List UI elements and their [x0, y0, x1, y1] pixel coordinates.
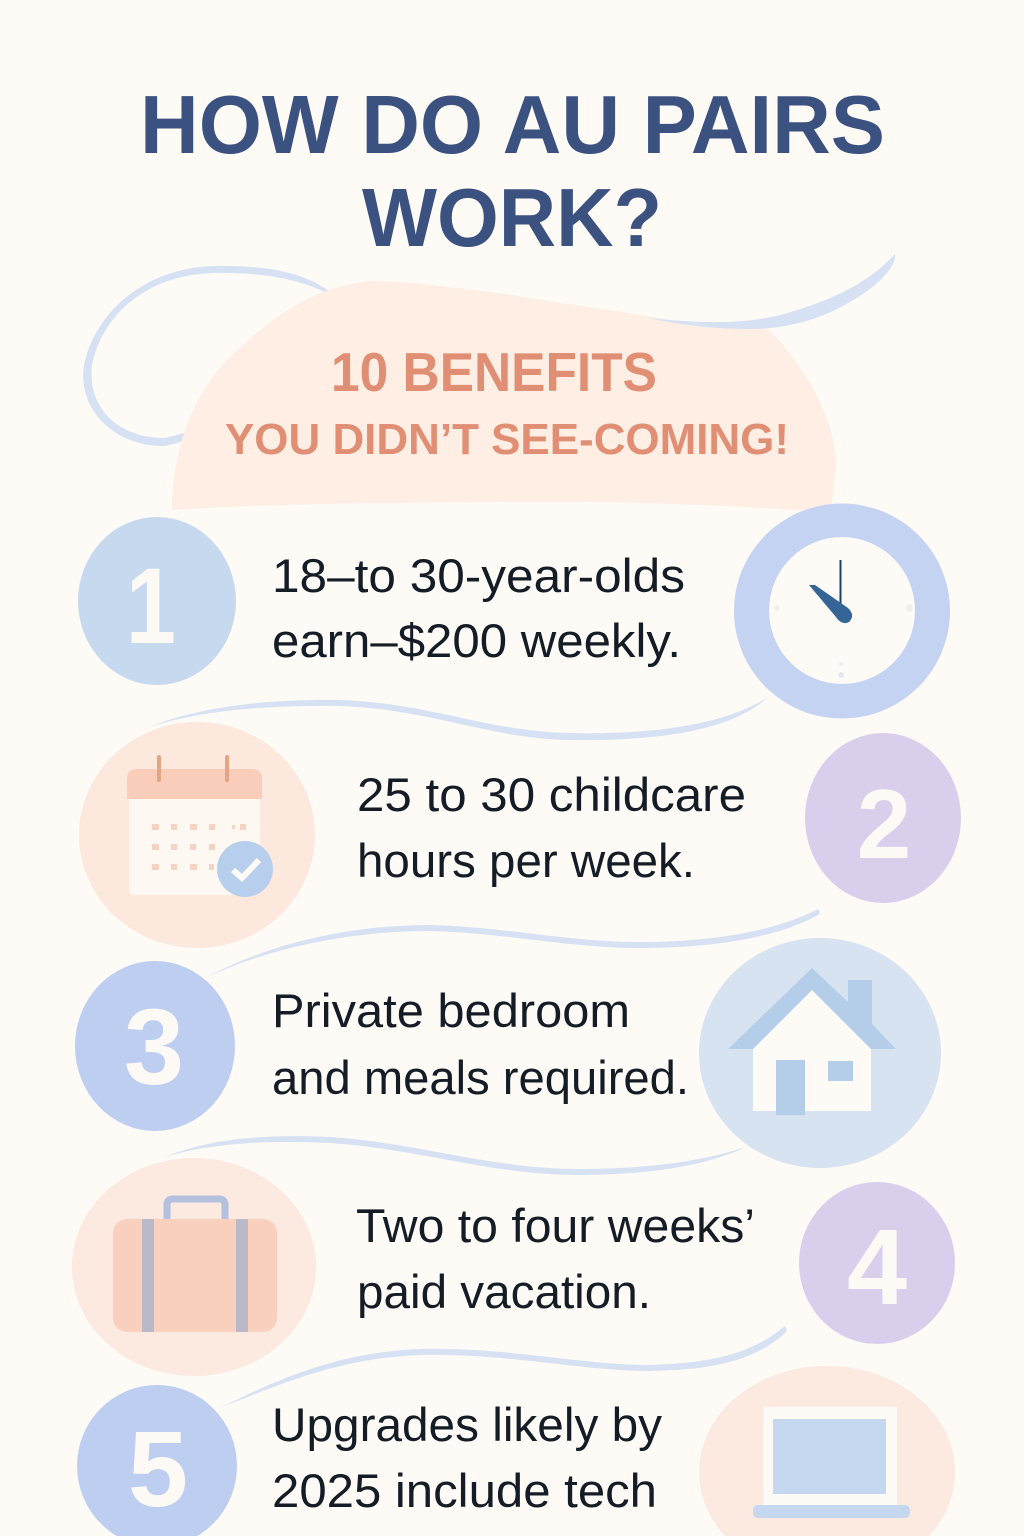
benefit 2	[79, 722, 961, 948]
title	[140, 78, 885, 264]
text: benefit 3	[272, 984, 689, 1104]
number badge 2	[805, 733, 961, 903]
text: benefit 1	[272, 549, 685, 667]
connector swoosh 2 to 3	[205, 909, 820, 978]
icon: laptop	[699, 1366, 955, 1536]
number badge 2: 2	[857, 769, 911, 879]
benefit 1	[78, 504, 950, 718]
text: benefit 5: Upgrades likely by	[272, 1398, 663, 1451]
icon: suitcase	[72, 1158, 316, 1376]
connector swoosh 1 to 2	[150, 697, 768, 740]
text: benefit 4: Two to four weeks’	[356, 1199, 755, 1252]
text: benefit 3: Private bedroom	[272, 984, 630, 1037]
text: benefit 2: 25 to 30 childcare	[357, 768, 746, 821]
banner blob	[172, 281, 836, 513]
number badge 3: 3	[124, 986, 184, 1107]
icon: clock	[734, 504, 950, 718]
title: WORK?	[362, 171, 662, 264]
text: benefit 1: earn–$200 weekly.	[272, 614, 681, 667]
connector swoosh 3 to 4	[165, 1136, 748, 1175]
number badge 4: 4	[847, 1206, 907, 1327]
number badge 1	[78, 517, 236, 685]
subtitle text	[225, 341, 789, 464]
number badge 5	[77, 1385, 237, 1536]
icon: calendar	[79, 722, 315, 948]
text: benefit 4: paid vacation.	[357, 1265, 651, 1318]
icon: house	[699, 938, 941, 1168]
number badge 1: 1	[126, 545, 176, 666]
title: HOW DO AU PAIRS	[140, 78, 885, 171]
text: benefit 5: 2025 include tech	[272, 1464, 657, 1517]
decorative swoosh: left loop	[83, 266, 337, 446]
subtitle text: 10 BENEFITS	[331, 341, 657, 403]
number badge 3	[75, 961, 235, 1131]
decorative swoosh: right tail	[648, 254, 895, 329]
text: benefit 5	[272, 1398, 663, 1517]
text: benefit 1: 18–to 30-year-olds	[272, 549, 685, 602]
connector swoosh 4 to 5	[220, 1326, 787, 1408]
benefit 5	[77, 1366, 955, 1536]
benefit 4	[72, 1158, 955, 1376]
text: benefit 2	[357, 768, 746, 887]
text: benefit 4	[356, 1199, 755, 1318]
number badge 4	[799, 1182, 955, 1344]
subtitle text: YOU DIDN’T SEE-COMING!	[225, 415, 789, 464]
panel: subtitle banner	[83, 254, 895, 513]
text: benefit 2: hours per week.	[357, 834, 695, 887]
number badge 5: 5	[128, 1408, 188, 1529]
benefit 3	[75, 938, 941, 1168]
text: benefit 3: and meals required.	[272, 1051, 689, 1104]
